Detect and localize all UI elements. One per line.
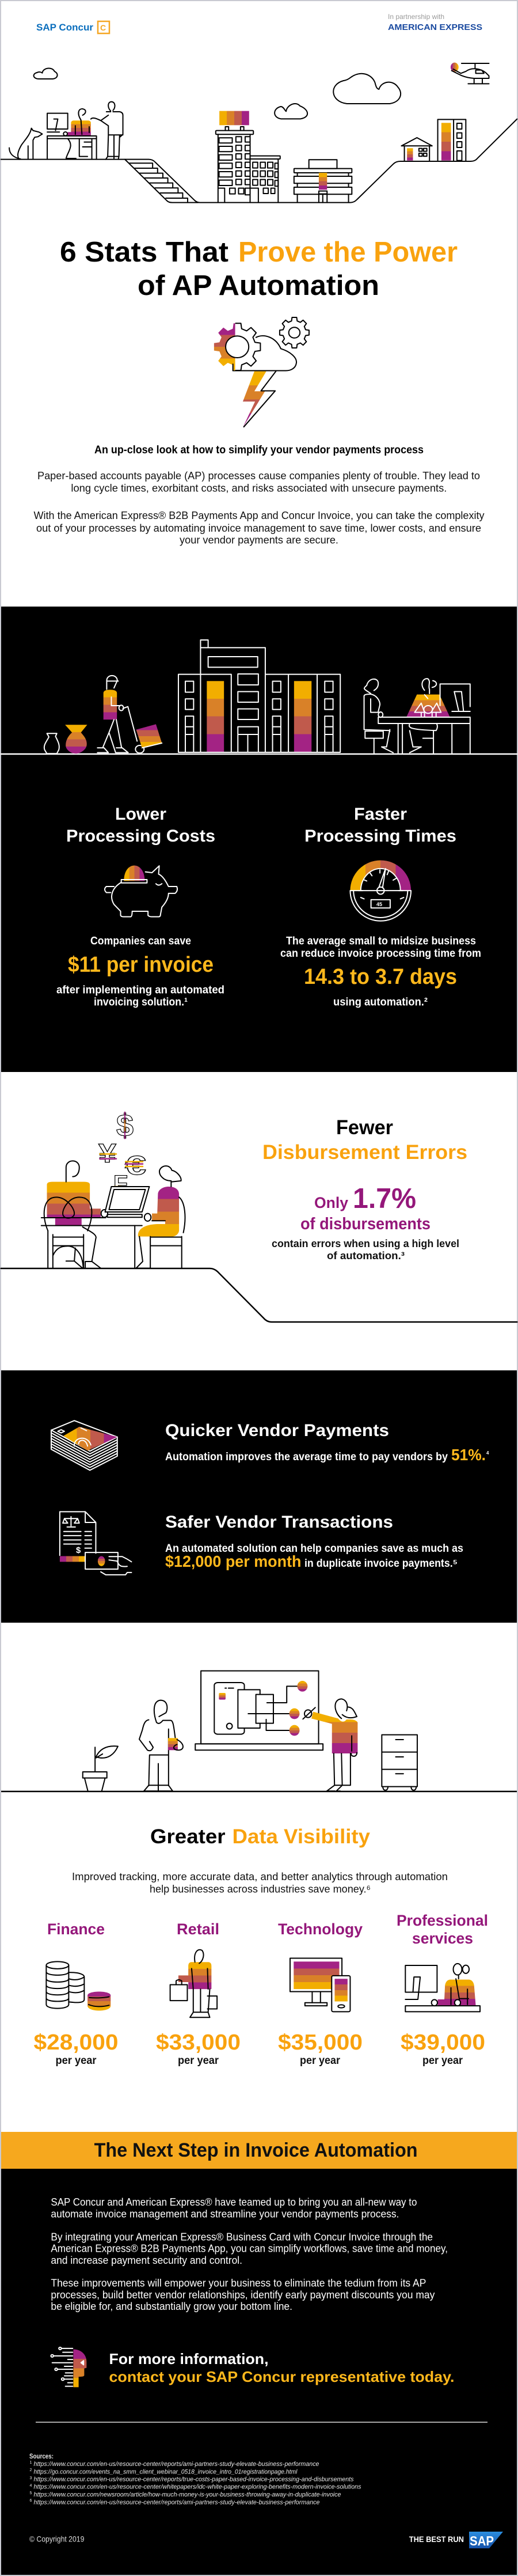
currency symbols: € <box>125 1150 146 1180</box>
column: retail: $33,000 <box>156 2031 241 2055</box>
text block: Improved tracking, more accurate data, and better analytics through automation <box>72 1870 448 1882</box>
icon: stacks of coins <box>46 1961 111 2010</box>
text: of automation.³ <box>327 1250 405 1262</box>
text: Companies can save <box>90 935 191 947</box>
illustration: delivery, building and office scene <box>1 640 517 754</box>
man with coffee <box>139 1700 183 1791</box>
title: 6 Stats That <box>60 237 228 268</box>
person left <box>41 1161 142 1268</box>
icon: cloud with gears and lightning <box>214 317 309 427</box>
text block: partnership paragraphs <box>51 2196 448 2312</box>
text: can reduce invoice processing time from <box>280 948 481 960</box>
heading: Lower <box>115 805 166 824</box>
text with stat <box>165 1543 463 1570</box>
icon: document with card payment <box>60 1511 131 1575</box>
stat value: Only <box>314 1194 348 1211</box>
column: technology <box>278 1920 363 2067</box>
currency symbols: F <box>113 1171 128 1196</box>
stat: faster processing times <box>280 805 481 1009</box>
column: retail: per year <box>178 2055 219 2067</box>
illustration: two people with currencies at a laptop <box>1 1108 517 1322</box>
sources: https://go.concur.com/events_na_smm_client_webinar_0518_invoice_intro_01registrationpage.html <box>33 2468 298 2475</box>
icon: potted plant <box>83 1746 118 1791</box>
heading: Processing Times <box>304 827 456 846</box>
panel: greater data visibility <box>1 1623 517 2132</box>
call to action: For more information, <box>109 2350 268 2367</box>
illustration: building with stripes <box>178 640 340 752</box>
text <box>272 1238 459 1262</box>
text with stat: in duplicate invoice payments.⁵ <box>304 1558 458 1570</box>
heading <box>304 805 456 846</box>
title: of AP Automation <box>138 270 379 301</box>
text <box>280 935 481 1009</box>
column: professional services <box>397 1912 488 2067</box>
text: contain errors when using a high level <box>272 1238 459 1249</box>
call to action <box>109 2350 455 2385</box>
title: Prove the Power <box>238 237 458 268</box>
illustration: people at a whiteboard <box>83 1671 417 1791</box>
column: technology: per year <box>300 2055 341 2067</box>
text block <box>72 1870 448 1895</box>
sources: https://www.concur.com/en-us/resource-center/whitepapers/idc-white-paper-exploring-benefits-modern-invoice-solutions <box>33 2484 361 2491</box>
subheading: An up-close look at how to simplify your vendor payments process <box>94 444 424 456</box>
text with stat: Automation improves the average time to pay vendors by <box>165 1451 448 1463</box>
heading: Faster <box>354 805 407 824</box>
sources: https://www.concur.com/newsroom/article/how-much-money-is-your-business-throwing-away-in-duplicate-invoice <box>33 2491 341 2498</box>
logo: SAP Concur: SAP Concur <box>36 22 93 33</box>
icon: speedometer <box>350 861 411 921</box>
sources: 2 <box>30 2468 32 2472</box>
logo: The Best Run SAP: SAP <box>470 2533 494 2548</box>
column: finance: $28,000 <box>33 2031 119 2055</box>
icon: cloud medium <box>275 104 307 119</box>
landscape ground line <box>1 119 517 203</box>
text block: intro paragraph two: your vendor payments are secure. <box>180 534 338 546</box>
whiteboard with diagram <box>195 1671 323 1750</box>
illustration: house and tower <box>401 119 466 161</box>
currency symbols <box>98 1108 146 1213</box>
call to action: contact your SAP Concur representative today. <box>109 2368 455 2385</box>
logo: American Express partnership <box>388 13 482 32</box>
laptop <box>105 1187 149 1268</box>
panel: fewer disbursement errors <box>1 1072 517 1370</box>
icon: striped vase <box>65 725 87 753</box>
sources: 6 <box>30 2499 32 2503</box>
stat value: of disbursements <box>300 1215 431 1233</box>
column: technology: Technology <box>278 1920 363 1938</box>
heading: Greater <box>150 1825 226 1848</box>
illustration: delivery person with trolley <box>97 676 162 753</box>
text block: partnership paragraphs: processes, build better vendor relationships, identify early payment discounts you may <box>51 2289 435 2301</box>
currency symbols: ¥ <box>98 1138 116 1168</box>
text block: partnership paragraphs: and increase payment security and control. <box>51 2255 242 2266</box>
stat value: $11 per invoice <box>68 953 214 977</box>
panel: vendor payments and transactions <box>1 1370 517 1623</box>
sources: 1 <box>30 2461 32 2465</box>
column: finance <box>33 1920 119 2067</box>
illustration: person with dog at desk <box>9 102 123 160</box>
icon: digital head <box>51 2347 86 2387</box>
stat value <box>300 1183 431 1233</box>
icon: cloud small <box>34 68 58 79</box>
ground line <box>1 1791 517 1792</box>
currency symbols: $ <box>116 1108 134 1143</box>
icon: cloud large <box>333 74 401 104</box>
column: finance: Finance <box>47 1920 105 1938</box>
sources: https://www.concur.com/en-us/resource-center/reports/true-costs-paper-based-invoice-processing-and-disbursements <box>33 2476 354 2483</box>
icon: desktop and phone <box>290 1958 350 2011</box>
stat value: 14.3 to 3.7 days <box>304 965 457 989</box>
banner: next step <box>1 2132 517 2169</box>
text block: intro paragraph two <box>33 509 485 546</box>
heading: Processing Costs <box>66 827 215 846</box>
text with stat: 51%. <box>451 1446 486 1464</box>
text block: partnership paragraphs: automate invoice management and streamline your vendor payments process. <box>51 2208 399 2220</box>
text block: help businesses across industries save money.⁶ <box>150 1883 371 1895</box>
text block: partnership paragraphs: By integrating your American Express® Business Card with Concur Invoice through the <box>51 2231 433 2242</box>
text with stat: $12,000 per month <box>165 1552 302 1570</box>
title <box>60 237 458 301</box>
logo: SAP Concur: C <box>100 23 106 32</box>
heading: Disbursement Errors <box>262 1141 467 1164</box>
icon: helicopter <box>451 63 489 84</box>
sources: 5 <box>30 2491 32 2495</box>
icon: stack of banknotes <box>51 1420 117 1470</box>
text block: intro paragraph two: With the American Express® B2B Payments App and Concur Invoice, you can take the complexity <box>33 509 485 521</box>
gauge readout: 45 <box>376 901 382 907</box>
sources: Sources: <box>29 2453 54 2460</box>
logo: American Express partnership: In partnership with <box>388 13 444 21</box>
logo: The Best Run SAP: THE BEST RUN <box>409 2535 464 2544</box>
heading: Data Visibility <box>233 1825 371 1848</box>
column: technology: $35,000 <box>278 2031 363 2055</box>
column: finance: per year <box>55 2055 97 2067</box>
filing cabinet <box>382 1735 417 1790</box>
heading: Safer Vendor Transactions <box>165 1513 393 1532</box>
illustration: two people at a desk <box>364 679 470 753</box>
stat value: 1.7% <box>353 1183 416 1214</box>
text: The average small to midsize business <box>286 935 476 947</box>
panel: lower costs and faster processing <box>1 607 517 1072</box>
copyright: © Copyright 2019 <box>29 2535 85 2544</box>
illustration: hillside city scene <box>1 63 517 203</box>
text with stat: An automated solution can help companies save as much as <box>165 1543 463 1555</box>
illustration: low-rise building <box>294 160 352 203</box>
heading <box>262 1116 467 1164</box>
text block: intro paragraph one <box>37 469 480 494</box>
sources: https://www.concur.com/en-us/resource-center/reports/ami-partners-study-elevate-business-performance <box>33 2461 319 2468</box>
text block: partnership paragraphs: be eligible for, and substantially grow your bottom line. <box>51 2301 292 2312</box>
banner: next step: The Next Step in Invoice Automation <box>94 2139 418 2161</box>
woman drawing on whiteboard <box>303 1699 357 1791</box>
sources: https://www.concur.com/en-us/resource-center/reports/ami-partners-study-elevate-business-performance <box>33 2499 320 2506</box>
heading <box>150 1825 371 1848</box>
icon label: dollar sign: $ <box>76 1545 81 1555</box>
sources <box>29 2453 361 2506</box>
text block: intro paragraph two: out of your processes by automating invoice management to save time, lower costs, and ensure <box>36 522 481 534</box>
text block: partnership paragraphs: These improvements will empower your business to eliminate the tedium from its AP <box>51 2278 426 2289</box>
panel: closing <box>1 2169 517 2575</box>
text with stat: 4 <box>486 1450 489 1456</box>
panel: intro <box>1 1 517 607</box>
heading: Fewer <box>336 1116 393 1139</box>
text: invoicing solution.¹ <box>94 997 188 1009</box>
column: retail: Retail <box>177 1920 219 1938</box>
text block: intro paragraph one: long cycle times, exorbitant costs, and risks associated with unsecure payments. <box>71 482 447 494</box>
icon: piggy bank <box>105 865 177 917</box>
stat: lower processing costs <box>56 805 224 1009</box>
currency symbols: B <box>119 1189 133 1213</box>
text block: intro paragraph one: Paper-based accounts payable (AP) processes cause companies plenty of trouble. They lead to <box>37 469 480 482</box>
illustration: office buildings <box>216 111 280 203</box>
text block: partnership paragraphs: American Express® B2B Payments App, you can simplify workflows, save time and money, <box>51 2243 448 2255</box>
column: professional services: services <box>412 1930 473 1947</box>
column: professional services: $39,000 <box>401 2031 485 2055</box>
heading <box>66 805 215 846</box>
ground line <box>1 1268 517 1322</box>
column: professional services: Professional <box>397 1912 488 1929</box>
text: using automation.² <box>333 997 428 1009</box>
text with stat <box>165 1446 489 1464</box>
column: retail <box>156 1920 241 2067</box>
sources: 3 <box>30 2476 32 2480</box>
logo: American Express partnership: AMERICAN EXPRESS <box>388 22 482 32</box>
text: after implementing an automated <box>56 984 224 997</box>
text <box>56 935 224 1009</box>
logo: The Best Run SAP <box>409 2532 503 2548</box>
icon: shopper with bags <box>170 1950 217 2017</box>
text block: partnership paragraphs: SAP Concur and American Express® have teamed up to bring you an all-new way to <box>51 2196 417 2208</box>
icon: vase outline <box>44 733 59 753</box>
heading: Quicker Vendor Payments <box>165 1421 389 1440</box>
person right <box>136 1166 185 1268</box>
icon: person at computer <box>405 1964 480 2011</box>
column: professional services: per year <box>422 2055 463 2067</box>
sources: 4 <box>30 2484 32 2488</box>
